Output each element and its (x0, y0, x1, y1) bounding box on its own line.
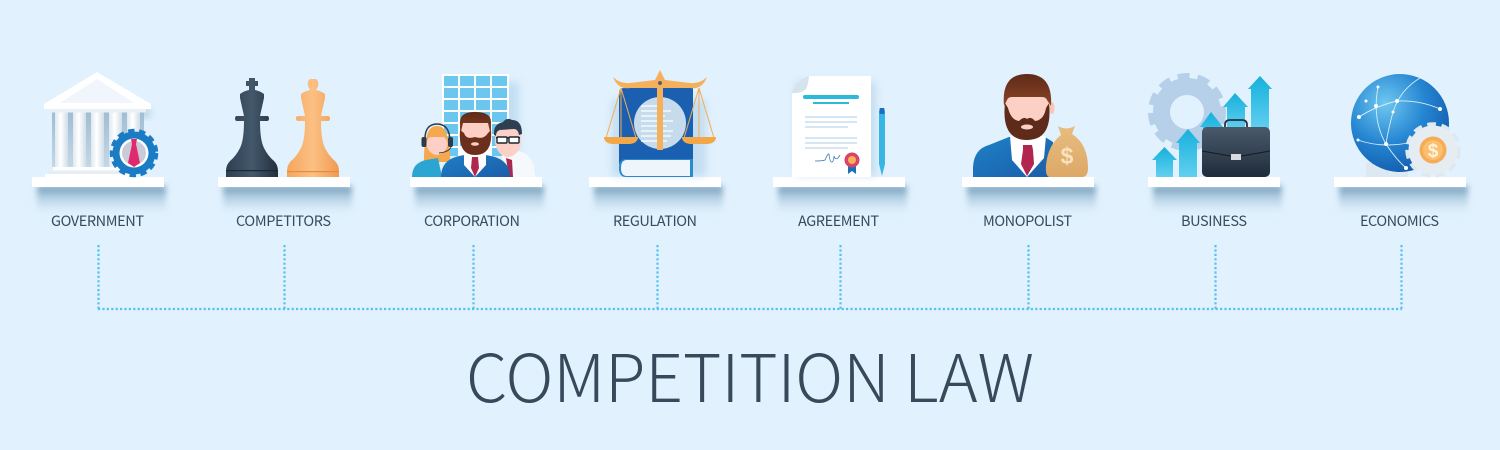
label: monopolist: MONOPOLIST (983, 210, 1072, 231)
man with glasses (502, 151, 535, 177)
icon: government building with gear (44, 72, 156, 177)
black king (226, 78, 278, 177)
icon: monopolist with money bag: $ (1061, 143, 1074, 169)
icon: globe with dollar gear: $ (1428, 141, 1439, 162)
label: corporation: CORPORATION (424, 210, 520, 231)
dotted connector bracket (98, 245, 1402, 309)
label: agreement: AGREEMENT (798, 210, 879, 231)
label: competitors: COMPETITORS (236, 210, 331, 231)
central bearded man (441, 153, 510, 177)
icon: law book and scales (604, 70, 716, 177)
title: COMPETITION LAW (466, 326, 1034, 422)
shelf: corporation (410, 177, 544, 213)
woman with headset (424, 130, 450, 162)
icon: globe with dollar gear (1351, 74, 1458, 177)
icon: chess pieces (226, 78, 339, 177)
shelf: agreement (773, 177, 907, 213)
icon: corporation team and building (412, 74, 535, 177)
label: business: BUSINESS (1181, 210, 1247, 231)
shelf: competitors (218, 177, 352, 213)
shelf: business (1148, 177, 1282, 213)
icon: monopolist with money bag (973, 74, 1088, 177)
icon: agreement document and pen (792, 76, 885, 177)
label: government: GOVERNMENT (51, 210, 144, 231)
label: regulation: REGULATION (613, 210, 697, 231)
shelf: monopolist (962, 177, 1096, 213)
shelf: government (32, 177, 166, 213)
shelf: economics (1334, 177, 1468, 213)
icon: business growth arrows and briefcase (1151, 76, 1272, 177)
orange king (287, 79, 339, 177)
label: economics: ECONOMICS (1360, 210, 1439, 231)
shelf: regulation (589, 177, 723, 213)
